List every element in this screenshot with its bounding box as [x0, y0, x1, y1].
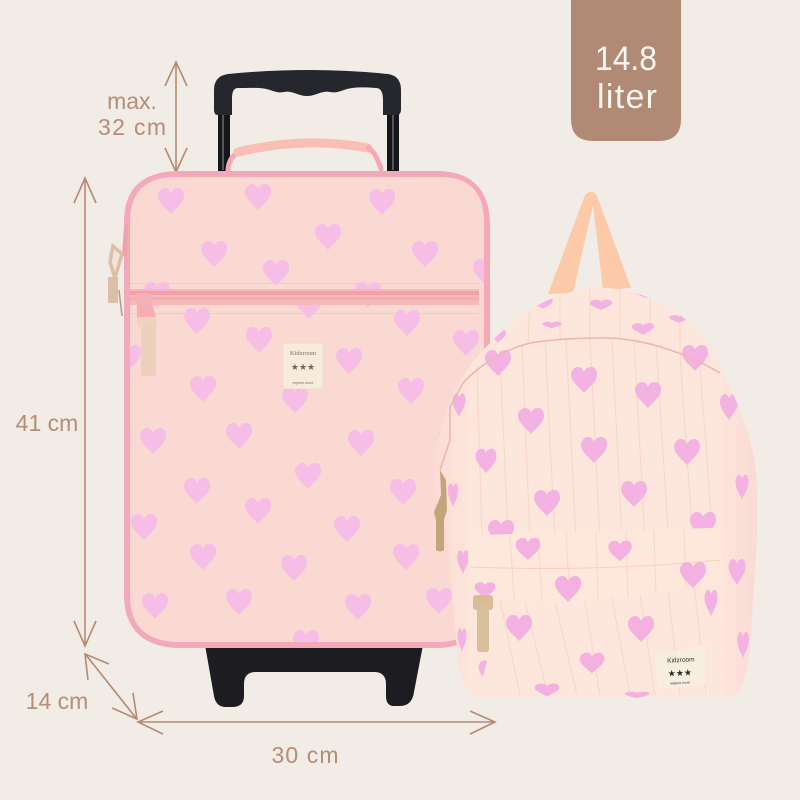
- label: 41 cm: 41 cm: [16, 410, 78, 436]
- brand label: Kidzroom: [290, 350, 316, 357]
- label: max. 32 cm: max.: [107, 88, 157, 114]
- volume badge: 14.8 liter: liter: [597, 78, 657, 116]
- backpack brand label: ★★★: [667, 667, 692, 679]
- depth arrow: [85, 654, 137, 719]
- backpack brand label: explore more: [670, 680, 690, 686]
- main zipper seam: [440, 338, 720, 470]
- trolley suitcase: [108, 70, 499, 707]
- volume badge: 14.8 liter: 14.8: [595, 40, 657, 78]
- backpack: [434, 192, 757, 698]
- side zipper pull: [434, 470, 447, 552]
- width arrow: [138, 711, 495, 734]
- brand label: ★★★: [291, 362, 315, 372]
- front zipper pull: [137, 293, 157, 376]
- pocket zipper pull: [473, 595, 493, 652]
- heart pattern: [130, 184, 484, 642]
- label: max. 32 cm: [98, 88, 166, 140]
- backpack brand label: [655, 645, 705, 689]
- lower pocket: [478, 575, 724, 695]
- bag body: [434, 288, 757, 698]
- case body: [124, 171, 490, 648]
- brand label: [283, 343, 323, 389]
- volume badge: 14.8 liter: [571, 0, 681, 141]
- side zipper pull: [108, 224, 128, 316]
- backpack brand label: Kidzroom: [667, 656, 695, 665]
- label: 30 cm: 30 cm: [272, 742, 338, 768]
- pocket hearts: [475, 538, 718, 698]
- front pocket flap: [468, 528, 723, 602]
- top loop handle: [548, 192, 631, 294]
- top carry handle: [228, 143, 381, 170]
- backpack heart pattern: [434, 290, 749, 684]
- label: 14 cm: 14 cm: [26, 688, 88, 714]
- height arrow: [74, 178, 96, 646]
- handle extension arrow: [165, 62, 187, 172]
- telescopic handle: [214, 70, 401, 172]
- quilting lines: [477, 288, 712, 540]
- brand label: explore more: [293, 381, 313, 385]
- pocket zipper: [130, 283, 479, 314]
- wheels: [205, 645, 423, 707]
- label: max. 32 cm: 32 cm: [98, 114, 166, 140]
